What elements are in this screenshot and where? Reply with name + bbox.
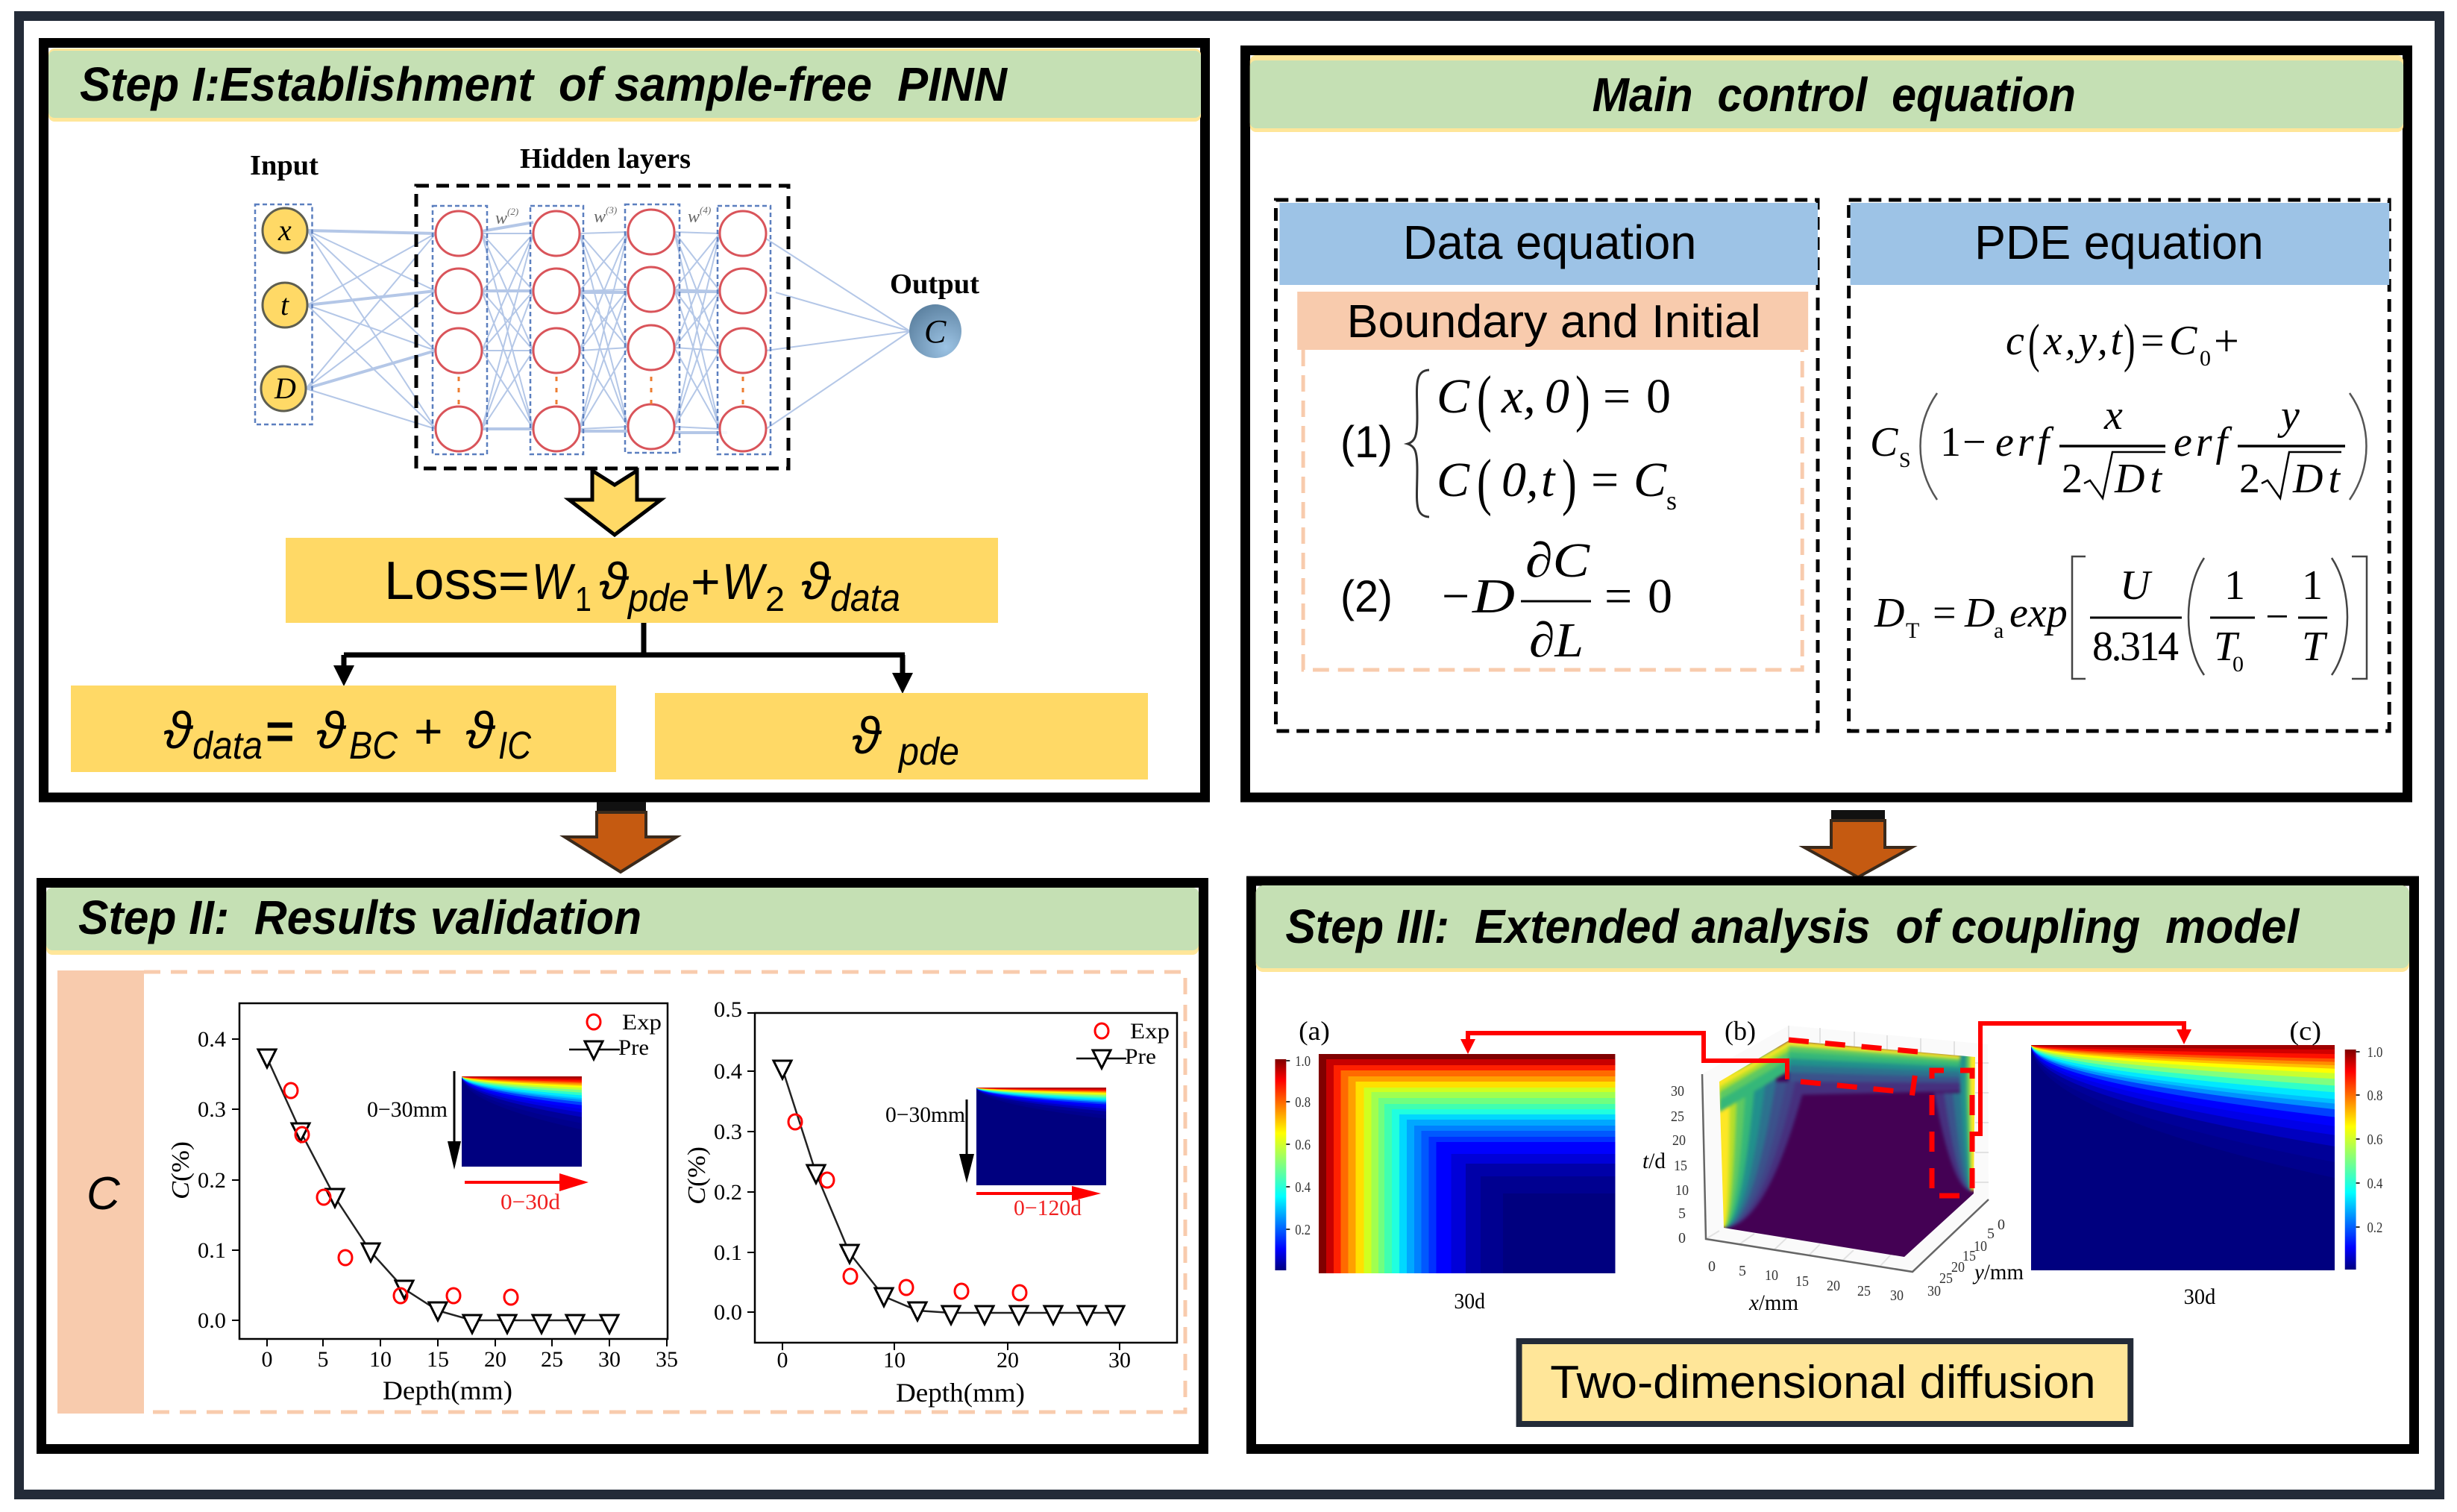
weight labels: w <box>594 207 606 227</box>
equation: concentration line 2: y <box>2277 392 2300 439</box>
label band: C: C <box>87 1168 121 1220</box>
equation: diffusion coefficient: a <box>1994 618 2003 643</box>
weight labels <box>495 204 711 228</box>
box: data loss: ϑ <box>465 701 496 759</box>
y axis labels: 20 <box>1951 1259 1965 1276</box>
equation: concentration line 2: 2 <box>2062 456 2083 502</box>
equation: diffusion coefficient: T <box>1906 618 1919 643</box>
legend: Pre <box>1125 1044 1156 1069</box>
equation: diffusion coefficient: D <box>1874 590 1904 636</box>
input nodes: x <box>277 213 292 247</box>
weight labels: (3) <box>606 204 617 216</box>
box: loss function: W <box>722 553 768 610</box>
equation 1: t <box>1541 453 1556 507</box>
equation: concentration line 1: C <box>2169 318 2197 364</box>
y axis labels: 0.3 <box>714 1120 742 1144</box>
colorbar (c): 0.4 <box>2367 1176 2382 1192</box>
axis titles and label (b) <box>1642 1016 2024 1315</box>
box: data loss <box>71 686 616 772</box>
legend <box>569 1010 662 1060</box>
label: (a) and 30d: 30d <box>1454 1289 1485 1314</box>
heatmap (a) <box>1319 1054 1615 1273</box>
band: data equation <box>1279 203 1818 285</box>
y axis labels: 0.1 <box>198 1238 226 1263</box>
labels: input, hidden, output: Hidden layers <box>520 143 691 175</box>
y axis labels: 0.0 <box>714 1300 742 1325</box>
legend: Pre <box>618 1035 649 1060</box>
equation: diffusion coefficient <box>1874 556 2367 679</box>
heading: Step I <box>48 48 1201 122</box>
equation 1: (1) <box>1340 417 1393 467</box>
series: Pre <box>774 1061 1124 1324</box>
legend <box>1076 1019 1170 1069</box>
panel: Step III extended analysis <box>1252 881 2414 1462</box>
t axis labels: 10 <box>1675 1182 1689 1199</box>
ellipsis dots <box>459 377 743 404</box>
panel: Step II results validation <box>42 883 1204 1449</box>
dashed frame <box>144 972 1185 1412</box>
input nodes <box>261 208 307 411</box>
callout: two-dimensional diffusion <box>1519 1341 2130 1424</box>
panel: main control equation <box>1246 51 2408 797</box>
y axis labels: 0.4 <box>714 1059 742 1084</box>
callout: two-dimensional diffusion: Two-dimensional diffusion <box>1550 1357 2096 1408</box>
x axis labels: 30 <box>598 1347 621 1372</box>
equation 1: C <box>1437 369 1470 424</box>
box: data loss: ϑ <box>316 701 347 759</box>
chart: 0-120 d validation <box>683 997 1177 1408</box>
equation 2: 0 <box>1648 569 1672 624</box>
box: loss function <box>286 538 998 623</box>
equation: diffusion coefficient: T <box>2214 624 2240 670</box>
equation 1: ( <box>1477 447 1492 517</box>
colorbar (c) <box>2345 1044 2382 1270</box>
colorbar (c): 0.2 <box>2367 1220 2382 1236</box>
dashed border: PDE equation <box>1849 200 2389 731</box>
equation 2: D <box>1472 569 1515 624</box>
heading: Step III <box>1256 885 2409 972</box>
equation 1: ) <box>1575 363 1590 433</box>
y axis labels <box>714 997 742 1325</box>
equation 1: C <box>1437 453 1470 507</box>
output node: C <box>924 313 947 350</box>
arrow: network to loss <box>569 471 661 535</box>
t axis labels: 30 <box>1671 1083 1684 1100</box>
equation: concentration line 2: erf <box>2174 419 2232 465</box>
colorbar (a) <box>1275 1053 1311 1270</box>
box: loss function: ϑ <box>599 552 630 610</box>
arrow: Step I to Step II <box>565 802 677 872</box>
inset heatmap <box>462 1076 582 1167</box>
dashed box: boundary and initial <box>1303 350 1802 670</box>
x axis labels: 25 <box>1857 1283 1871 1299</box>
network connections <box>306 222 910 433</box>
inset axes arrows and labels: 0−30mm <box>367 1097 448 1122</box>
x axis labels: 10 <box>883 1348 906 1373</box>
axis titles and label (b): (b) <box>1725 1016 1756 1046</box>
equation: concentration line 2: x <box>2103 392 2123 439</box>
hidden nodes <box>436 210 766 451</box>
inset axes arrows and labels: 0−30mm <box>885 1102 965 1127</box>
equation: concentration line 2: 2 <box>2239 456 2260 502</box>
axis titles and label (b): x/mm <box>1748 1290 1798 1315</box>
colorbar (a): 0.8 <box>1295 1094 1311 1111</box>
equation 2: ∂C <box>1525 533 1590 588</box>
box: loss function: pde <box>627 577 689 620</box>
x axis labels: 30 <box>1890 1287 1904 1304</box>
x axis labels: 0 <box>1708 1258 1716 1275</box>
t axis labels: 0 <box>1678 1230 1686 1246</box>
equation: diffusion coefficient: = <box>1933 590 1957 636</box>
equation: concentration line 2: S <box>1899 449 1911 472</box>
arrow: equations to Step III <box>1804 810 1912 877</box>
y axis labels: 30 <box>1927 1283 1941 1299</box>
equation: diffusion coefficient: 1 <box>2302 562 2323 609</box>
equation: diffusion coefficient: U <box>2120 562 2153 609</box>
equation: concentration line 2 <box>1870 392 2366 502</box>
label: (c) and 30d <box>2184 1016 2321 1309</box>
y axis labels: 0.4 <box>198 1027 226 1052</box>
heading: main control equation <box>1250 55 2403 132</box>
equation: concentration line 1 <box>2006 314 2239 374</box>
axis titles: Depth(mm) <box>383 1375 512 1405</box>
heading: main control equation: Main control equation <box>1592 68 2076 122</box>
inset axes arrows and labels <box>885 1100 1101 1220</box>
heading: Step I: Step I:Establishment of sample-free PINN <box>80 57 1008 111</box>
equation 2: = <box>1604 569 1632 624</box>
y axis labels: 0 <box>1998 1217 2005 1233</box>
x axis labels: 20 <box>1827 1278 1840 1294</box>
labels: input, hidden, output: Input <box>250 150 318 181</box>
x axis labels: 10 <box>1765 1267 1778 1284</box>
x axis labels: 0 <box>261 1347 273 1372</box>
label: (c) and 30d: (c) <box>2289 1016 2321 1046</box>
input nodes: t <box>280 288 289 321</box>
x axis labels: 20 <box>484 1347 506 1372</box>
equation 1: 0, <box>1502 453 1538 507</box>
x axis labels: 15 <box>1795 1273 1809 1290</box>
equation: diffusion coefficient: D <box>1964 590 1995 636</box>
axis titles: C(%) <box>167 1141 195 1199</box>
equation 1: 0 <box>1545 369 1569 424</box>
series: Exp <box>284 1083 518 1305</box>
label: (c) and 30d: 30d <box>2184 1284 2215 1309</box>
equation: diffusion coefficient: T <box>2302 624 2328 670</box>
red dashed slices on volume <box>1789 1040 1972 1196</box>
arrow: split to both loss terms <box>333 623 913 694</box>
t axis labels: 25 <box>1671 1108 1684 1125</box>
hidden layer column boxes <box>433 204 771 454</box>
colorbar (a): 0.4 <box>1295 1179 1311 1196</box>
t axis labels <box>1671 1083 1689 1246</box>
equation: concentration line 1: + <box>2214 316 2239 366</box>
band: data equation: Data equation <box>1403 216 1696 269</box>
equation 2 <box>1340 533 1672 668</box>
equation 1 <box>1340 363 1677 517</box>
equation: concentration line 2: C <box>1870 419 1898 465</box>
box: pde loss <box>655 693 1148 779</box>
red connector: slice to heatmap (c) <box>1972 1023 2191 1134</box>
equation 1: s <box>1666 486 1677 515</box>
band: boundary and initial: Boundary and Initial <box>1347 296 1761 348</box>
3D diffusion volume (b) <box>1642 1016 2024 1315</box>
box: data loss: ϑ <box>163 701 194 759</box>
box: pde loss: ϑ <box>852 706 882 765</box>
y axis labels: 0.0 <box>198 1308 226 1333</box>
equation: diffusion coefficient: 0 <box>2232 652 2244 677</box>
axis titles: C(%) <box>683 1146 711 1205</box>
equation: concentration line 1: ) <box>2124 314 2136 374</box>
equation 2: (2) <box>1340 571 1393 621</box>
axis titles <box>167 1141 512 1405</box>
panel: Step I establishment of PINN <box>43 43 1205 797</box>
heading: Step II: Step II: Results validation <box>78 891 641 944</box>
equation 1: x, <box>1501 369 1536 424</box>
box: loss function: 2 <box>765 580 785 618</box>
equation 1: ) <box>1562 447 1577 517</box>
equation: concentration line 1: 0 <box>2200 346 2211 371</box>
box: loss function: + <box>691 553 721 610</box>
x axis labels: 30 <box>1108 1348 1131 1373</box>
equation 1: = <box>1591 453 1619 507</box>
legend: Exp <box>622 1010 662 1035</box>
box: loss function: 1 <box>575 580 592 618</box>
colorbar (c): 0.6 <box>2367 1132 2382 1148</box>
labels: input, hidden, output: Output <box>890 269 979 300</box>
equation: concentration line 2: − <box>1962 419 1986 465</box>
y axis labels: 0.2 <box>714 1180 742 1205</box>
inset axes arrows and labels: 0−30d <box>501 1190 560 1214</box>
input layer box <box>255 204 312 424</box>
equation: diffusion coefficient: 1 <box>2224 562 2245 609</box>
box: loss function: ϑ <box>801 552 832 610</box>
equation 1: ( <box>1477 363 1492 433</box>
sub-panel: data equation <box>1275 200 1818 731</box>
inset axes arrows and labels: 0−120d <box>1014 1196 1082 1220</box>
x axis labels: 20 <box>997 1348 1019 1373</box>
label: (a) and 30d <box>1299 1016 1485 1314</box>
chart: 0-30 d validation <box>167 1003 678 1405</box>
x axis labels: 35 <box>656 1347 678 1372</box>
diagram: neural network <box>250 143 979 468</box>
3D axes walls <box>1702 1026 1989 1272</box>
y axis labels: 0.2 <box>198 1168 226 1193</box>
y axis labels: 5 <box>1987 1226 1995 1242</box>
x axis labels: 0 <box>777 1348 788 1373</box>
input nodes: D <box>274 371 296 405</box>
equation 1: C <box>1634 453 1667 507</box>
sub-panel: PDE equation <box>1849 200 2389 731</box>
equation: diffusion coefficient: 8.314 <box>2092 624 2179 670</box>
red connector: slice to heatmap (a) <box>1460 1033 1787 1079</box>
band: PDE equation <box>1851 203 2389 285</box>
volume surface <box>1719 1041 1975 1257</box>
series: Exp <box>788 1114 1026 1300</box>
equation: concentration line 1: x,y,t <box>2043 318 2123 364</box>
x axis labels: 5 <box>1739 1263 1746 1279</box>
weight labels: (2) <box>507 206 518 217</box>
labels: input, hidden, output <box>250 143 979 300</box>
x axis labels <box>1708 1258 1904 1304</box>
equation: concentration line 2: Dt <box>2292 456 2341 502</box>
equation: concentration line 2: erf <box>1995 419 2054 465</box>
box: pde loss: pde <box>897 730 959 774</box>
dashed border: data equation <box>1275 200 1818 731</box>
x axis labels <box>777 1348 1131 1373</box>
x axis labels: 15 <box>427 1347 449 1372</box>
colorbar (a): 0.6 <box>1295 1137 1311 1153</box>
equation: concentration line 2: 1 <box>1940 419 1961 465</box>
y axis labels: 0.1 <box>714 1240 742 1265</box>
box: loss function: data <box>830 577 900 620</box>
hidden layers dashed box <box>416 186 788 468</box>
y axis labels: 0.3 <box>198 1097 226 1122</box>
label: (a) and 30d: (a) <box>1299 1016 1330 1046</box>
equation: concentration line 2: Dt <box>2114 456 2162 502</box>
box: data loss: data <box>192 724 263 768</box>
equation 2: − <box>1442 569 1469 624</box>
colorbar (c): 0.8 <box>2367 1088 2382 1104</box>
equation: concentration line 1: c <box>2006 318 2024 364</box>
heading: Step III: Step III: Extended analysis of coupling model <box>1285 900 2300 953</box>
t axis labels: 15 <box>1674 1158 1687 1174</box>
inset heatmap <box>976 1088 1106 1185</box>
heatmap (c) <box>2031 1045 2335 1270</box>
label band: C <box>57 970 144 1414</box>
colorbar (c): 1.0 <box>2367 1044 2382 1061</box>
equation 1: 0 <box>1646 369 1671 424</box>
weight labels: (4) <box>700 204 711 216</box>
equation: diffusion coefficient: − <box>2265 594 2289 640</box>
box: loss function: W <box>532 553 576 610</box>
t axis labels: 20 <box>1672 1132 1686 1149</box>
legend: Exp <box>1130 1019 1170 1044</box>
y axis labels <box>1927 1217 2005 1299</box>
box: loss function: Loss= <box>384 551 530 611</box>
y axis labels <box>198 1027 226 1333</box>
y axis labels: 10 <box>1974 1238 1987 1255</box>
output node <box>909 304 961 358</box>
equation 2: ∂L <box>1529 613 1584 668</box>
x axis labels: 5 <box>318 1347 328 1372</box>
x axis labels: 10 <box>369 1347 392 1372</box>
heading: Step II <box>46 888 1199 955</box>
equation: diffusion coefficient: exp <box>2009 590 2068 636</box>
axis titles and label (b): t/d <box>1642 1149 1666 1173</box>
t axis labels: 5 <box>1678 1205 1686 1222</box>
inset axes arrows and labels <box>367 1071 589 1214</box>
x axis labels: 25 <box>541 1347 563 1372</box>
y axis labels: 25 <box>1939 1270 1953 1287</box>
axis titles: Depth(mm) <box>896 1378 1025 1408</box>
box: data loss: + <box>414 703 443 759</box>
band: PDE equation: PDE equation <box>1974 216 2264 269</box>
y axis labels: 15 <box>1962 1248 1976 1264</box>
box: data loss: IC <box>498 724 531 768</box>
x axis labels <box>261 1347 678 1372</box>
equation: concentration line 1: ( <box>2028 314 2040 374</box>
colorbar (a): 0.2 <box>1295 1222 1311 1238</box>
weight labels: w <box>688 207 700 227</box>
equation: concentration line 1: = <box>2141 318 2165 364</box>
box: data loss: BC <box>349 724 398 768</box>
box: data loss: = <box>266 703 295 759</box>
equation 1: = <box>1603 369 1631 424</box>
y axis labels: 0.5 <box>714 997 742 1022</box>
colorbar (a): 1.0 <box>1295 1053 1311 1070</box>
weight labels: w <box>495 209 507 228</box>
series: Pre <box>258 1050 618 1333</box>
axis titles and label (b): y/mm <box>1972 1260 2024 1284</box>
axis titles <box>683 1146 1025 1408</box>
